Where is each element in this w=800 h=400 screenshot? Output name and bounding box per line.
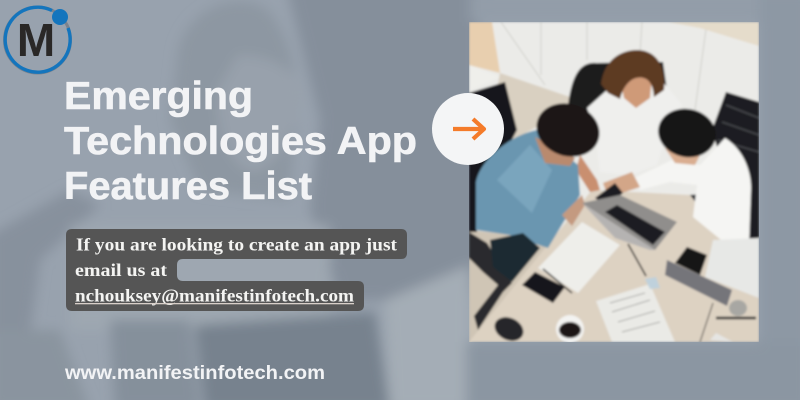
dark pen right	[716, 317, 756, 319]
person: left neck	[535, 137, 575, 166]
title: Emerging	[64, 75, 253, 118]
person: right hand	[603, 172, 640, 197]
back chair	[469, 82, 517, 232]
phone in hand	[594, 182, 624, 201]
small card	[710, 333, 733, 342]
person: left jeans	[490, 233, 540, 282]
logo shadow ring	[4, 7, 70, 73]
photo: team meeting around a table	[469, 22, 759, 345]
callout: email message	[66, 229, 407, 311]
paper right	[705, 238, 759, 298]
laptop keyboard	[605, 205, 665, 245]
black tablet	[675, 247, 707, 275]
callout text: nchouksey@manifestinfotech.com	[75, 286, 354, 306]
callout text: email us at	[75, 260, 167, 280]
wall	[469, 22, 759, 233]
floor lower left	[469, 230, 546, 342]
callout text: If you are looking to create an app just	[76, 234, 397, 254]
paper bottom	[596, 284, 675, 342]
logo dot	[52, 9, 68, 25]
wooden skirt	[469, 22, 500, 73]
person: right face	[665, 148, 700, 165]
centre chair	[567, 60, 668, 114]
paper lines	[610, 293, 660, 332]
wall panel seams	[501, 22, 707, 110]
shirt highlight	[497, 145, 552, 213]
logo letter: M	[17, 14, 55, 66]
badge circle	[432, 93, 504, 165]
person: centre curly hair	[601, 50, 664, 99]
website url: www.manifestinfotech.com	[64, 363, 325, 384]
pen on paper	[543, 269, 572, 293]
callout text	[75, 234, 397, 306]
person: centre face	[620, 76, 652, 108]
phone left	[522, 272, 565, 303]
person: right white shirt	[634, 138, 751, 253]
logo	[4, 7, 70, 73]
left chair base	[469, 232, 512, 330]
logo ring	[5, 7, 70, 72]
title: Technologies App	[64, 120, 417, 163]
sticky note	[645, 277, 660, 289]
title: Features List	[64, 165, 312, 208]
email underline	[75, 303, 354, 304]
title	[64, 75, 417, 208]
person: centre white shirt	[585, 82, 668, 120]
laptop edge	[582, 203, 655, 250]
orange arrow	[453, 119, 484, 139]
callout dark background	[66, 229, 407, 311]
person: left blue shirt	[476, 130, 580, 248]
person: left arm	[562, 195, 585, 226]
paper left	[538, 222, 620, 293]
floor	[495, 73, 570, 140]
upper trim	[668, 22, 759, 46]
person: centre arm	[576, 155, 600, 192]
right chair	[712, 92, 759, 240]
person: right dark trousers	[689, 193, 697, 202]
cup lid	[729, 300, 747, 316]
pen	[628, 244, 646, 276]
table	[469, 190, 759, 342]
coffee cup	[556, 315, 584, 343]
person: left hair	[535, 102, 601, 158]
laptop centre	[582, 195, 677, 250]
side cabinet	[469, 65, 500, 91]
arrow badge	[432, 93, 504, 165]
table edge	[700, 303, 713, 342]
mouse	[491, 313, 527, 345]
laptop right	[665, 260, 732, 306]
person: right hair	[656, 107, 717, 159]
